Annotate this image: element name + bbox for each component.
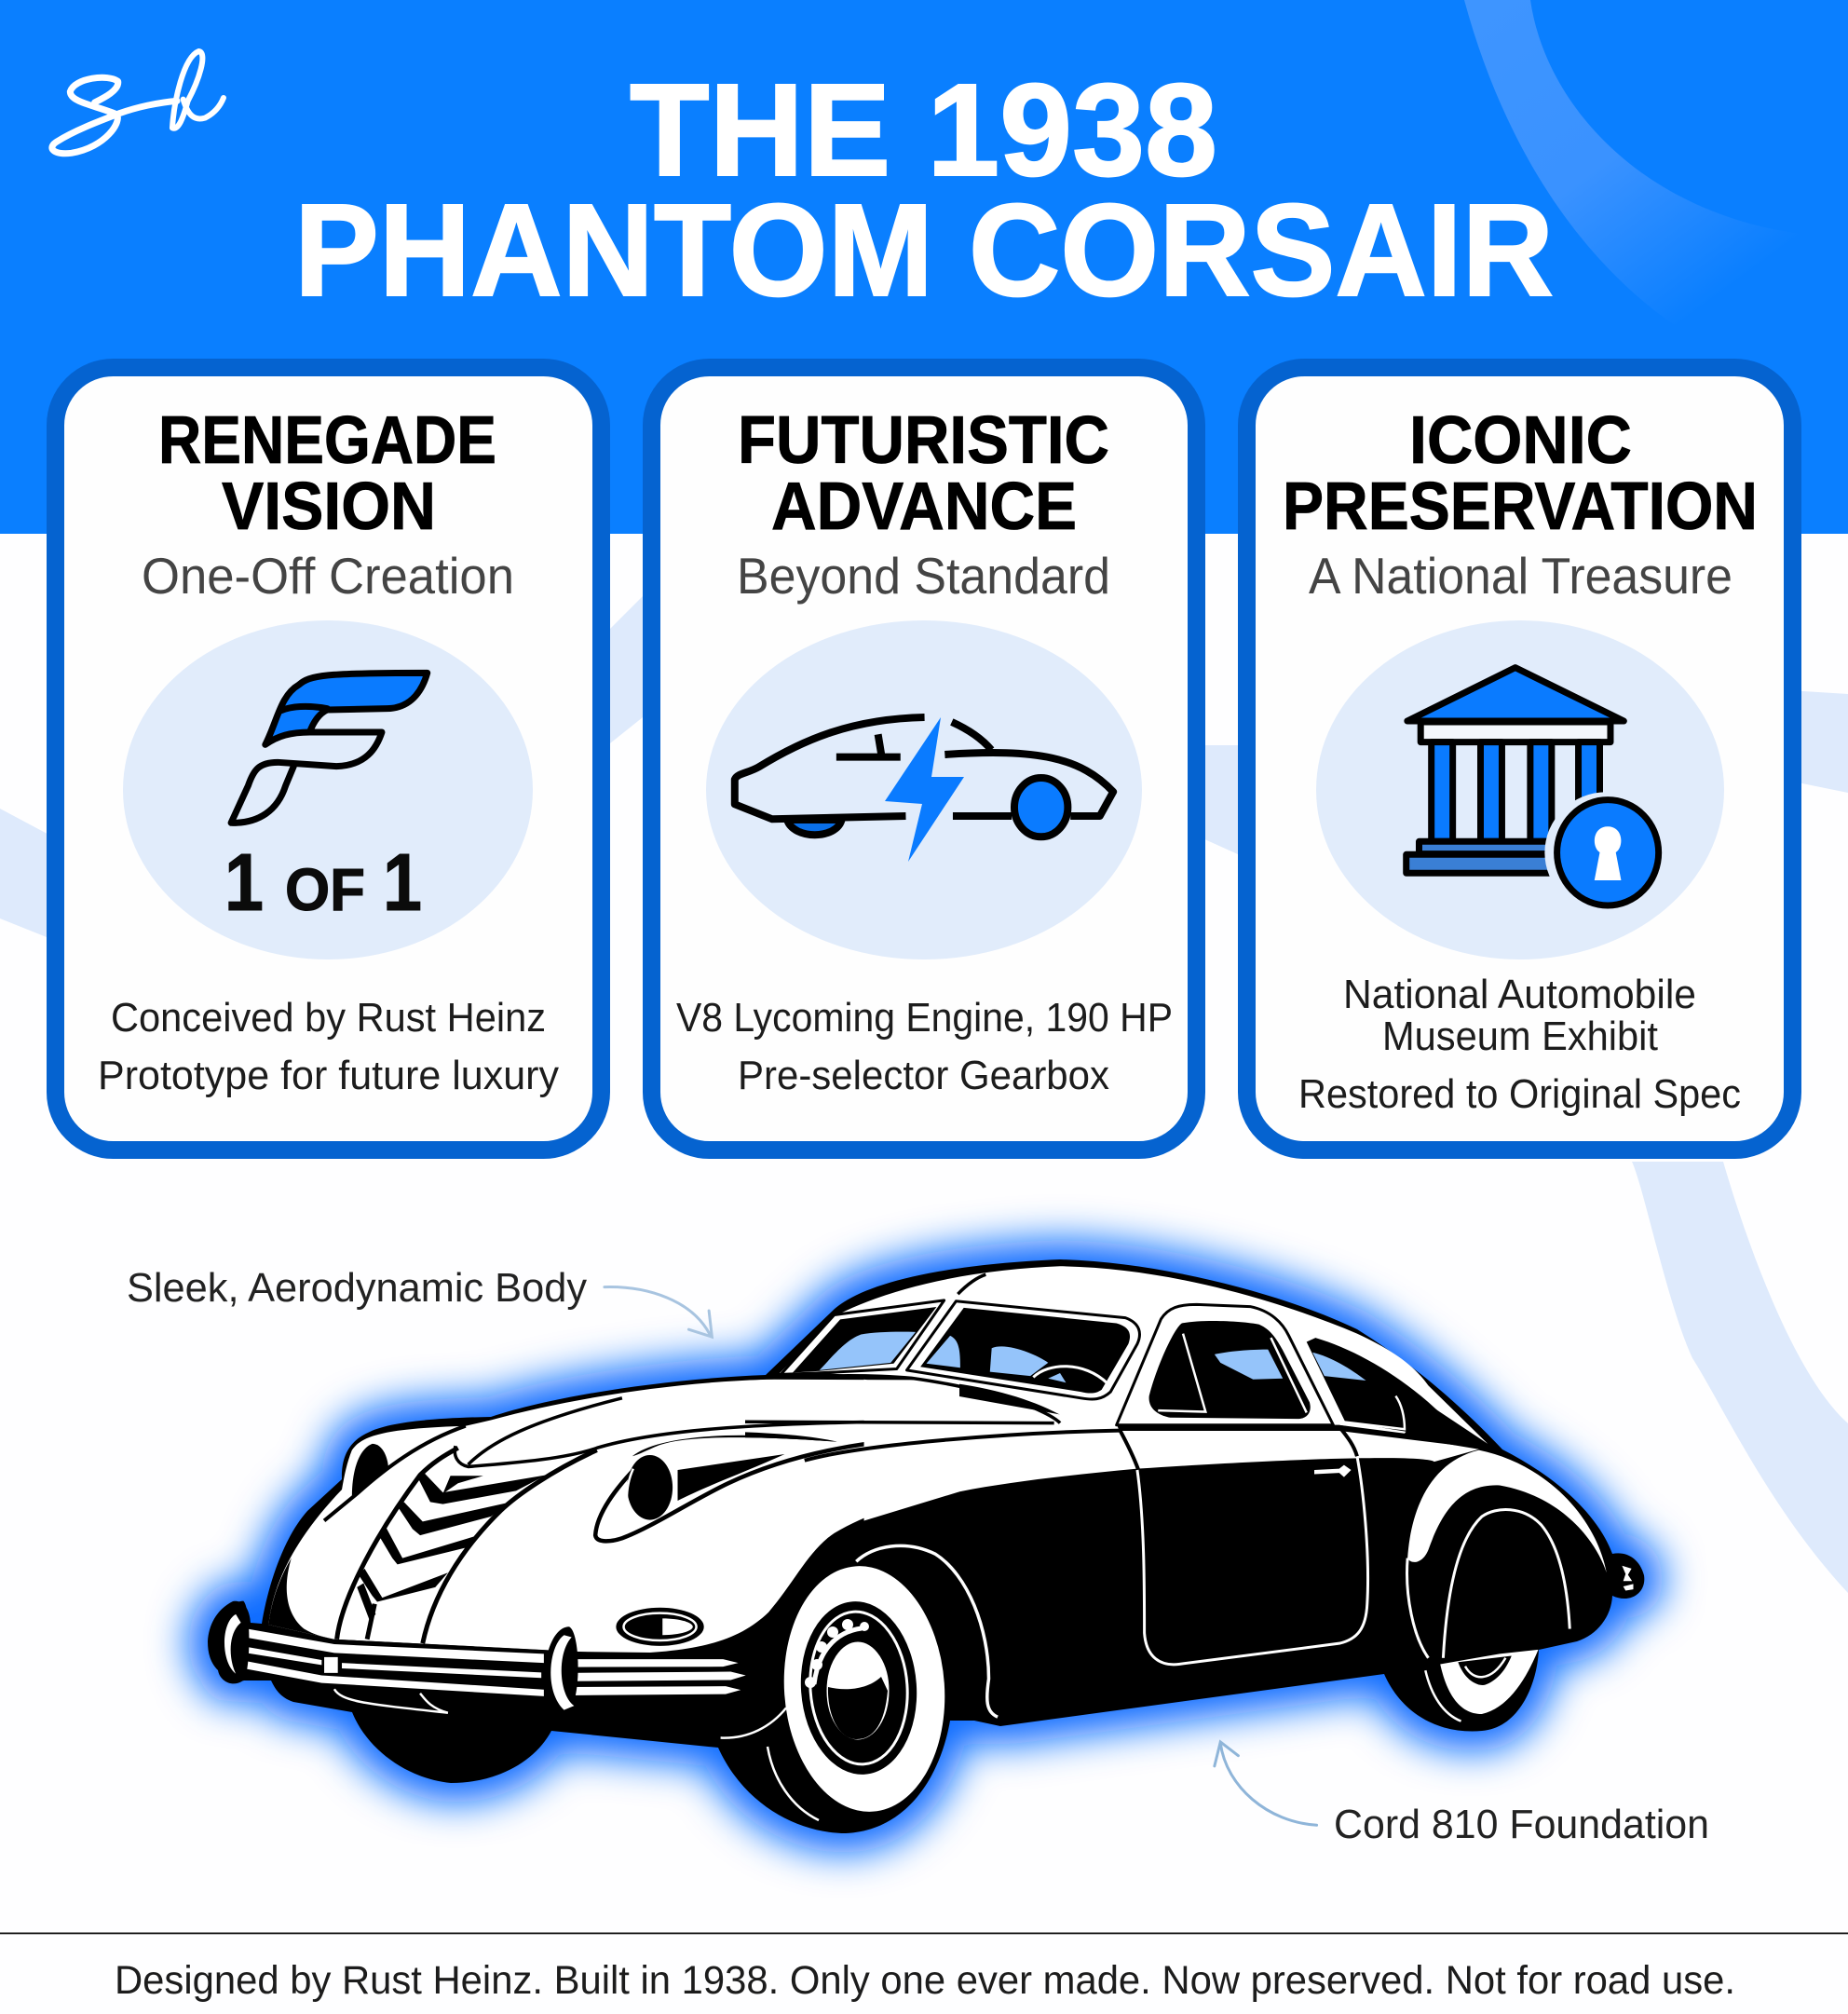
body text: iconic preservation: Restored to Original Spec xyxy=(1298,1071,1741,1117)
right headlight outline xyxy=(595,1436,959,1541)
quarter windscreen xyxy=(793,1307,936,1373)
icon circle: car and bolt xyxy=(706,620,1142,959)
subheading: one-off creation: One-Off Creation xyxy=(142,547,514,605)
tyre xyxy=(776,1560,953,1817)
bumper end highlight xyxy=(224,1614,241,1674)
bumper guard highlight xyxy=(550,1635,574,1710)
centre windscreen xyxy=(920,1308,1130,1394)
annotation: sleek body xyxy=(127,1265,712,1337)
fender crest swoosh xyxy=(632,1436,836,1456)
title: THE 1938 xyxy=(630,56,1217,203)
rear fender xyxy=(1407,1450,1607,1572)
parking light ring xyxy=(624,1613,697,1640)
wheel well xyxy=(795,1598,922,1778)
fender dart xyxy=(678,1454,784,1501)
quarter windscreen glass xyxy=(820,1332,916,1370)
body text: renegade vision: Conceived by Rust Heinz xyxy=(111,995,546,1041)
heading: iconic preservation xyxy=(1283,403,1758,544)
title xyxy=(294,56,1554,323)
icon circle: museum xyxy=(1316,620,1724,959)
hub xyxy=(825,1640,890,1741)
title: PHANTOM CORSAIR xyxy=(294,176,1554,323)
hood and front body xyxy=(268,1380,959,1653)
icon circle: winged F, 1 of 1 xyxy=(123,620,533,959)
left fender line xyxy=(324,1426,466,1520)
heading: iconic preservation: ICONIC xyxy=(1409,403,1632,478)
roof and side panel xyxy=(780,1266,1488,1444)
body text: renegade vision: Prototype for future luxury xyxy=(98,1053,559,1098)
chevron top xyxy=(442,1476,483,1493)
heading: futuristic advance xyxy=(738,403,1109,544)
left headlight xyxy=(352,1444,388,1496)
grille side lines xyxy=(337,1448,597,1643)
annotation: cord 810: Cord 810 Foundation xyxy=(1334,1802,1709,1847)
door window post xyxy=(1158,1334,1307,1412)
heading: renegade vision: RENEGADE xyxy=(158,403,496,478)
left fender shadow xyxy=(268,1558,334,1640)
logo: signature xyxy=(52,51,224,154)
subheading: a national treasure: A National Treasure xyxy=(1309,547,1732,605)
annotation: sleek body: Sleek, Aerodynamic Body xyxy=(127,1265,587,1311)
arrow to body xyxy=(605,1287,712,1337)
door window inner xyxy=(1149,1321,1311,1419)
body text: iconic preservation xyxy=(1298,972,1741,1117)
subheading: beyond standard: Beyond Standard xyxy=(737,547,1110,605)
stat: 1 of 1: 1 xyxy=(383,837,422,928)
car illustration xyxy=(208,1259,1644,1833)
body text: futuristic advance: V8 Lycoming Engine, 190 HP xyxy=(676,995,1173,1041)
background bands xyxy=(0,587,1848,1593)
steering wheel xyxy=(1033,1367,1107,1383)
parking light lens xyxy=(662,1618,693,1635)
heading: renegade vision: VISION xyxy=(222,469,436,544)
centre windscreen glass xyxy=(927,1336,1066,1382)
body text: futuristic advance: Pre-selector Gearbox xyxy=(738,1053,1109,1098)
under bumper lines xyxy=(334,1689,786,1738)
quarter windscreen frame xyxy=(781,1300,944,1374)
hub shadow xyxy=(828,1677,888,1739)
rim rings xyxy=(805,1609,913,1767)
heading: futuristic advance: FUTURISTIC xyxy=(738,403,1109,478)
rear tyre xyxy=(1440,1650,1538,1714)
bumper end xyxy=(215,1601,249,1681)
annotation: cord 810 xyxy=(1215,1742,1709,1847)
tyre sidewall line xyxy=(768,1747,819,1820)
panel: iconic preservation xyxy=(1246,367,1792,1150)
body text: iconic preservation: National Automobile xyxy=(1343,972,1696,1017)
rear window xyxy=(1307,1338,1479,1448)
icon: lightning bolt xyxy=(885,717,964,862)
car glow xyxy=(208,1259,1644,1833)
fender crest swoosh tail xyxy=(745,1432,837,1442)
bumper bar xyxy=(218,1629,754,1699)
centre windscreen frame xyxy=(906,1301,1139,1399)
body crease line xyxy=(805,1431,1120,1461)
headlight trim xyxy=(627,1469,633,1529)
gear teeth xyxy=(805,1619,869,1688)
heading: renegade vision xyxy=(158,403,496,544)
panel: renegade vision xyxy=(56,367,602,1150)
body text: futuristic advance xyxy=(676,995,1173,1098)
tail light xyxy=(1622,1566,1634,1590)
bumper guard xyxy=(544,1626,578,1709)
car front section xyxy=(215,1380,959,1738)
icon: car outline left xyxy=(735,717,925,835)
front fender arc xyxy=(856,1545,998,1717)
stat: 1 of 1: OF xyxy=(285,856,365,923)
footer text: Designed by Rust Heinz. Built in 1938. Only one ever made. Now preserved. Not for road use. xyxy=(115,1958,1735,2003)
rear window frame xyxy=(1304,1340,1405,1429)
front wheel xyxy=(768,1560,953,1820)
heading: iconic preservation: PRESERVATION xyxy=(1283,469,1758,544)
car silhouette xyxy=(208,1259,1644,1833)
footer rule xyxy=(0,1932,1848,1934)
door window frame xyxy=(1117,1304,1333,1425)
gear ring xyxy=(814,1628,862,1684)
body text: iconic preservation: Museum Exhibit xyxy=(1382,1014,1658,1059)
icon: museum with keyhole xyxy=(1406,668,1667,913)
rear window glass xyxy=(1312,1353,1366,1381)
parking light xyxy=(616,1608,704,1646)
door split lines on belt xyxy=(1120,1427,1357,1470)
door outline xyxy=(1137,1456,1368,1665)
header background xyxy=(0,0,1848,534)
rear hub xyxy=(1458,1656,1512,1685)
right headlight lens xyxy=(627,1455,673,1520)
heading: futuristic advance: ADVANCE xyxy=(771,469,1077,544)
door window glass xyxy=(1215,1350,1283,1380)
hood lines xyxy=(455,1398,959,1466)
body text: renegade vision xyxy=(98,995,559,1098)
icon: winged F xyxy=(231,673,428,823)
panel: futuristic advance xyxy=(652,367,1196,1150)
rear tyre hub ring xyxy=(1425,1658,1505,1721)
arrow to chassis xyxy=(1215,1742,1317,1825)
icon: car outline right xyxy=(944,722,1113,837)
cowl line and roof seam xyxy=(745,1274,1060,1423)
door handle xyxy=(1314,1465,1352,1477)
bumper strips xyxy=(229,1626,746,1696)
side panel xyxy=(864,1380,1479,1520)
chevrons xyxy=(357,1473,547,1621)
car rear section xyxy=(745,1266,1634,1721)
belt line xyxy=(1117,1424,1479,1448)
stat: 1 of 1 xyxy=(224,837,422,928)
stat: 1 of 1: 1 xyxy=(224,837,264,928)
rear fender lines xyxy=(1407,1510,1569,1658)
